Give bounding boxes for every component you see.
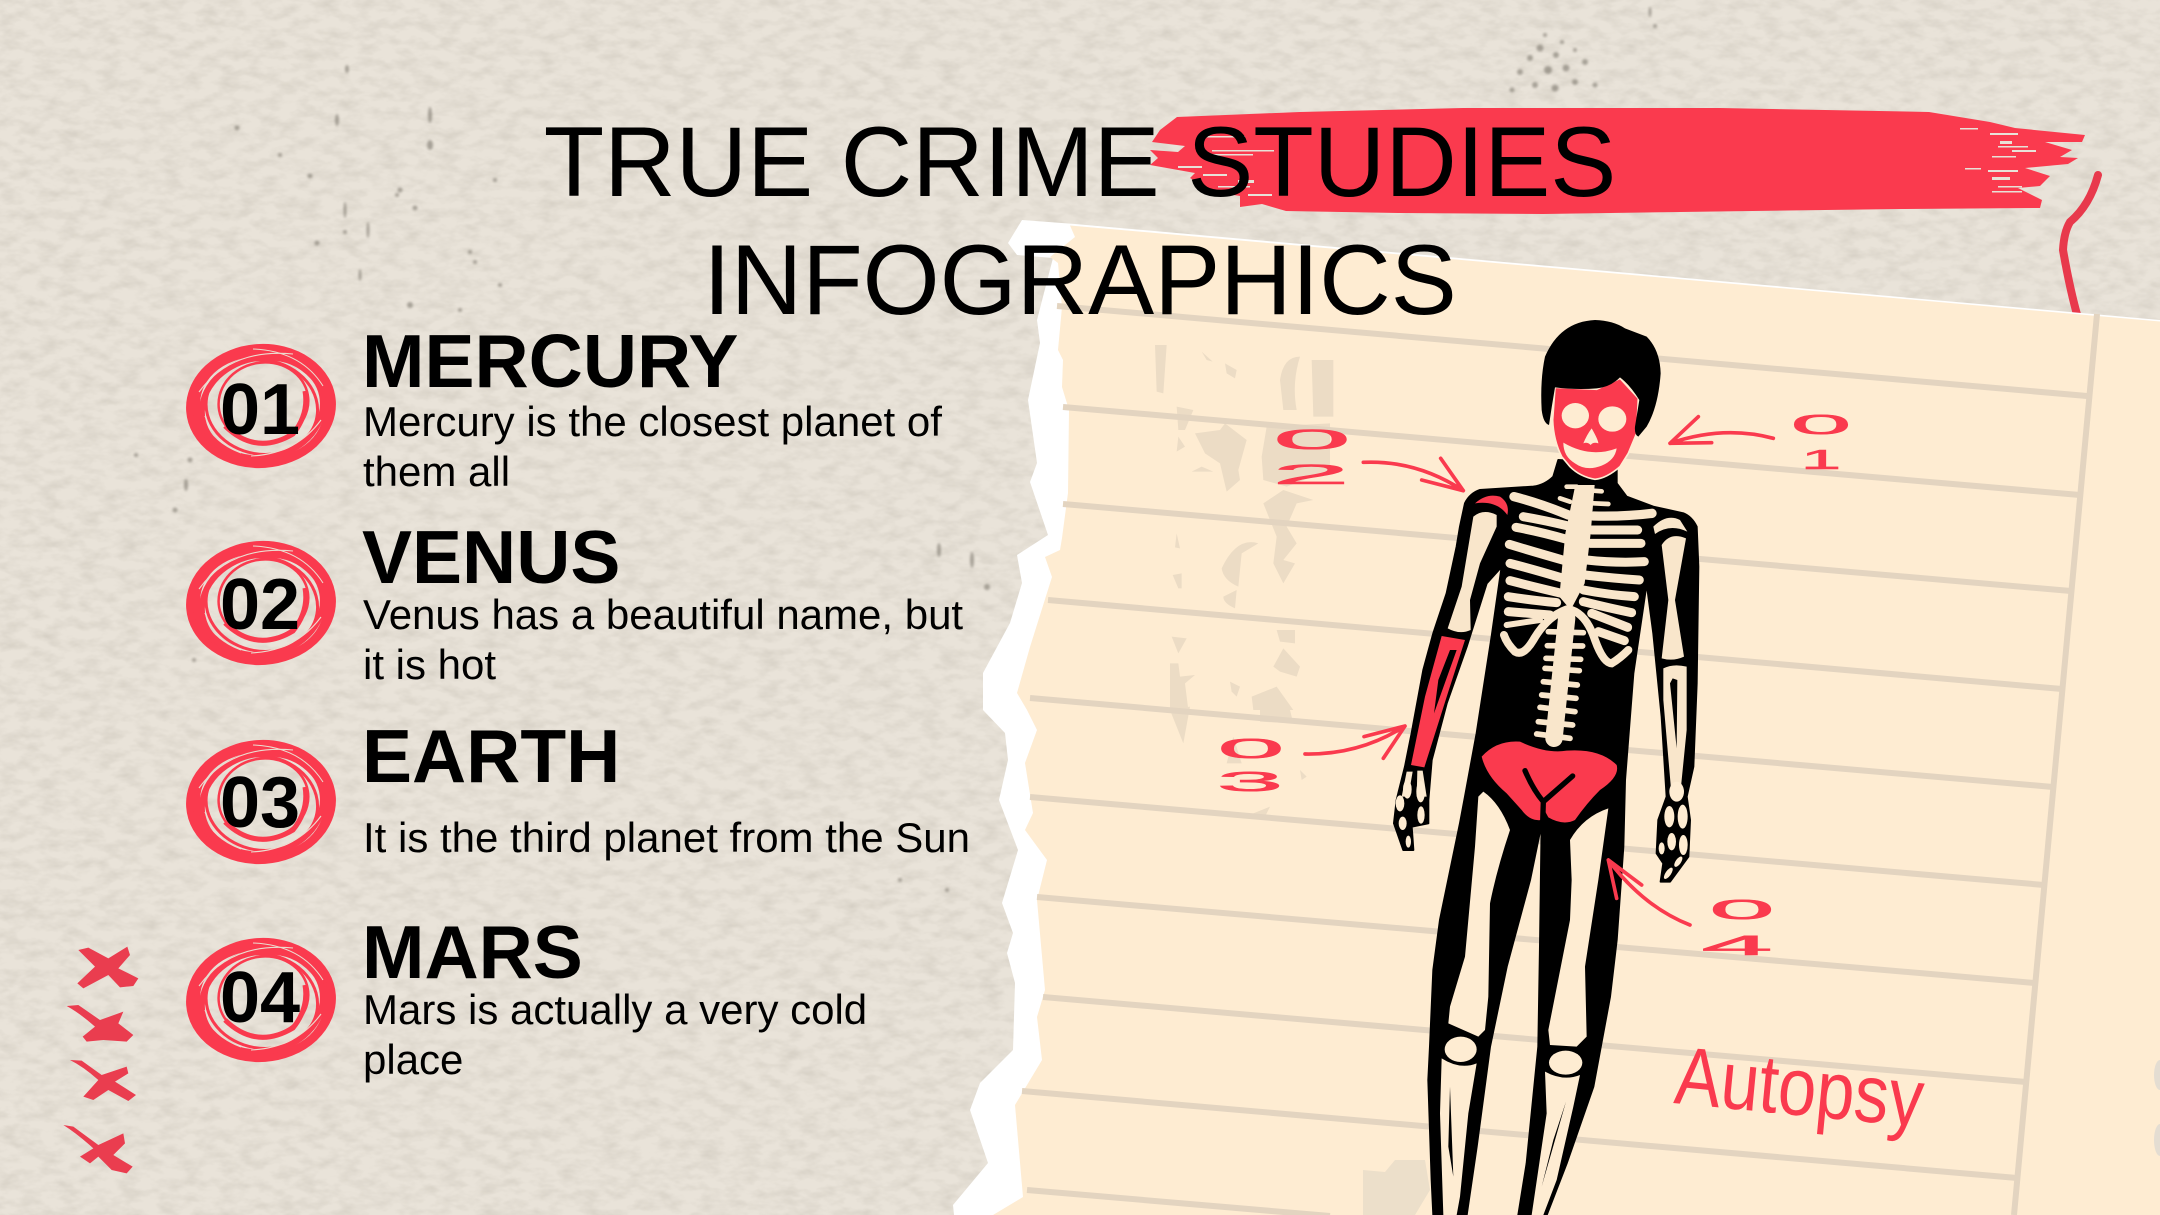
lower body in second coordinate frame [1396, 780, 1688, 1215]
item 02 [186, 515, 963, 688]
left arm bones [1448, 512, 1497, 632]
paper hole marks [2154, 1060, 2160, 1156]
callout 02: 0 [1273, 424, 1351, 455]
callout 04 [1701, 894, 1775, 961]
arrow 02 [1363, 458, 1463, 491]
arrow 03 [1305, 726, 1405, 758]
pelvis centre mark [1525, 771, 1573, 823]
description: Venus: it is hot [363, 641, 496, 688]
callout 03: 3 [1217, 766, 1283, 797]
heading: Earth: EARTH [362, 714, 620, 798]
torn white backing [953, 220, 2160, 1215]
handwritten label: Autopsy: Autopsy [1671, 1030, 1928, 1145]
description: Mars: Mars is actually a very cold [363, 986, 867, 1033]
spine [1537, 618, 1583, 738]
head: face [1553, 378, 1638, 479]
callout 01: 0 [1791, 409, 1851, 440]
shin bones [1440, 1058, 1580, 1215]
item 04 [186, 910, 867, 1083]
icon: four red crosses [63, 947, 138, 1173]
faded stain near the shins [1363, 1160, 1430, 1215]
left finger bones [1402, 771, 1427, 797]
description: Mercury: Mercury is the closest planet of [363, 398, 942, 445]
icon: scribbled circle 04 [186, 937, 336, 1064]
icon: scribbled circle 02 [186, 540, 336, 667]
callout 04: 0 [1709, 894, 1775, 925]
icon: scribbled circle 03 [186, 739, 336, 866]
title: TRUE CRIME STUDIES [544, 106, 1616, 217]
heading: Mercury: MERCURY [362, 319, 738, 403]
item 01 [186, 319, 942, 495]
number 01: 01 [220, 370, 300, 450]
callout 03 [1217, 733, 1284, 797]
description: Earth: It is the third planet from the Sun [363, 814, 970, 861]
description: Mars: place [363, 1036, 463, 1083]
arrows pointing at highlighted bones [1305, 417, 1773, 925]
number 04: 04 [220, 958, 300, 1038]
arrow 01 [1670, 417, 1773, 443]
head: eyes, nose, teeth [1562, 403, 1626, 468]
handwritten callout numbers [1217, 409, 1851, 961]
title [544, 106, 1616, 335]
description: Venus: Venus has a beautiful name, but [363, 591, 963, 638]
red shoulder highlight [1475, 496, 1508, 515]
right arm bones [1653, 518, 1687, 797]
panel: torn note paper [953, 220, 2160, 1215]
red marker stroke at top right [2063, 175, 2098, 318]
heading: Venus: VENUS [362, 515, 620, 599]
number 02: 02 [220, 565, 300, 645]
item 03 [186, 714, 970, 866]
callout 03: 0 [1218, 733, 1284, 764]
red forearm highlight [1411, 636, 1465, 767]
brush stroke behind title [1150, 108, 2085, 214]
cream sheet [993, 226, 2160, 1215]
body silhouette [1394, 460, 1698, 1215]
hand bones [1396, 780, 1688, 880]
heading: Mars: MARS [362, 910, 583, 994]
number 03: 03 [220, 763, 300, 843]
callout 02: 2 [1272, 459, 1350, 490]
thigh bones [1448, 792, 1608, 1047]
title: INFOGRAPHICS [703, 224, 1457, 335]
ruled lines [1022, 306, 2097, 1215]
callout 01 [1791, 409, 1851, 475]
icon: scribbled circle 01 [186, 343, 336, 470]
callout 02 [1272, 424, 1351, 490]
skeleton figure [1394, 320, 1698, 1215]
arrow 04 [1608, 860, 1690, 925]
callout 01: 1 [1801, 444, 1841, 475]
red pelvis highlight [1482, 742, 1617, 822]
faded stains [1155, 345, 1333, 820]
head: hair [1541, 320, 1661, 437]
callout 04: 4 [1701, 930, 1773, 961]
description: Mercury: them all [363, 448, 510, 495]
ribcage [1504, 485, 1652, 663]
knee caps [1445, 1037, 1582, 1075]
